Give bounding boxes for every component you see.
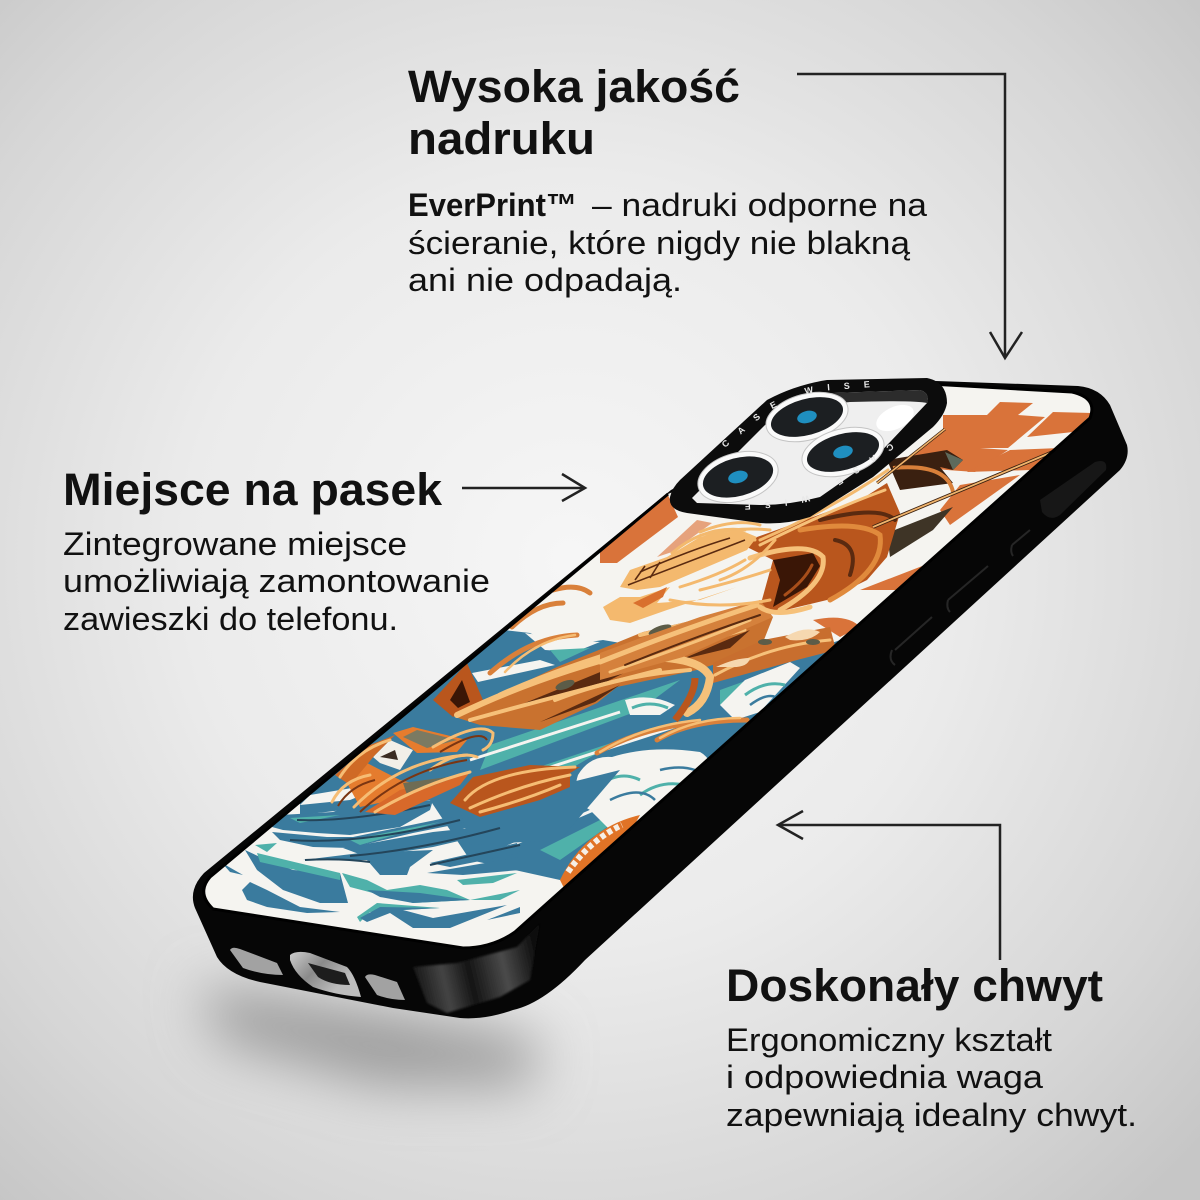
wave teal bands <box>480 648 744 860</box>
wave dark shadow lines <box>290 805 520 865</box>
foam curls <box>600 684 785 795</box>
body line 1: Ergonomiczny kształt <box>726 1022 1052 1058</box>
sea bands lower <box>222 770 620 920</box>
sea <box>300 630 840 880</box>
glass top lip <box>773 390 928 425</box>
callout: grip <box>726 960 1137 1133</box>
lower right dragon <box>713 627 836 683</box>
callout: strap slot <box>63 464 490 637</box>
wave white lines <box>450 712 680 850</box>
camera ring <box>670 378 947 523</box>
arrow: strap slot <box>462 474 585 501</box>
body line 2: i odpowiednia waga <box>726 1059 1043 1095</box>
right speaker <box>365 974 405 1000</box>
sea deep bands <box>360 890 507 928</box>
body line 3: ani nie odpadają. <box>408 262 682 298</box>
sea upper foam <box>300 633 600 805</box>
lower neck strands <box>600 600 773 680</box>
case rim <box>204 384 1092 948</box>
body line 1: Zintegrowane miejsce <box>63 526 407 562</box>
speckled orange bar <box>657 520 712 557</box>
neck <box>747 483 900 613</box>
orange geometric bars <box>600 402 1093 637</box>
left speaker <box>230 948 283 975</box>
boat <box>332 727 493 815</box>
phone case illustration <box>192 378 1128 1018</box>
bottom ports <box>230 948 405 1000</box>
arrow: grip <box>778 811 1000 960</box>
neck mouth dark <box>773 553 820 607</box>
whiskers <box>670 540 775 605</box>
heading: Wysoka jakość <box>408 61 740 112</box>
upper jaw shadow <box>628 538 745 585</box>
lower jaw <box>603 587 737 623</box>
foam curls dark <box>610 696 780 800</box>
ring lettering bottom: CASE WISE <box>745 444 894 510</box>
strap slot <box>1040 461 1106 518</box>
main foam <box>576 662 800 830</box>
camera module <box>670 378 947 524</box>
tan paws <box>716 629 820 667</box>
hair <box>672 470 888 555</box>
neck ribs <box>750 490 895 610</box>
orange badge <box>560 815 640 890</box>
phone shadow <box>200 985 540 1085</box>
heading: Doskonały chwyt <box>726 960 1103 1011</box>
brand name: EverPrint™ <box>408 187 577 223</box>
side buttons <box>891 530 1030 665</box>
lens left <box>692 443 784 511</box>
flash <box>872 400 918 436</box>
lower noodle clump <box>450 765 580 817</box>
camera glass <box>692 390 928 505</box>
sea noodles <box>490 587 747 753</box>
main body <box>455 607 773 730</box>
body line 1: – nadruki odporne na <box>592 187 927 223</box>
body shadows <box>524 630 750 722</box>
arrow: print quality <box>797 74 1022 358</box>
dragon tail upper <box>887 450 963 490</box>
case corner highlight <box>413 923 540 1013</box>
case body <box>193 379 1128 1018</box>
tongue <box>633 587 667 608</box>
spears <box>873 429 1062 527</box>
sea teal lower <box>255 815 520 922</box>
body light strands <box>457 610 830 720</box>
body eyes <box>554 622 820 692</box>
body arch <box>665 656 714 717</box>
callout: print quality <box>408 61 927 298</box>
charging port <box>290 952 361 997</box>
lens top <box>760 384 854 450</box>
heading line 2: nadruku <box>408 113 595 164</box>
noodle dragon <box>433 429 1062 730</box>
body line 3: zawieszki do telefonu. <box>63 601 398 637</box>
printed artwork <box>205 386 1090 946</box>
ring lettering top: CASE WISE <box>722 381 870 447</box>
body line 3: zapewniają idealny chwyt. <box>726 1097 1137 1133</box>
body line 2: ścieranie, które nigdy nie blakną <box>408 225 910 261</box>
tail stump <box>433 663 483 717</box>
body line 2: umożliwiają zamontowanie <box>63 563 490 599</box>
upper jaw <box>620 530 757 590</box>
dragon tail lower <box>887 507 953 557</box>
artwork base <box>205 386 1090 946</box>
heading: Miejsce na pasek <box>63 464 443 515</box>
lens right <box>796 419 890 485</box>
